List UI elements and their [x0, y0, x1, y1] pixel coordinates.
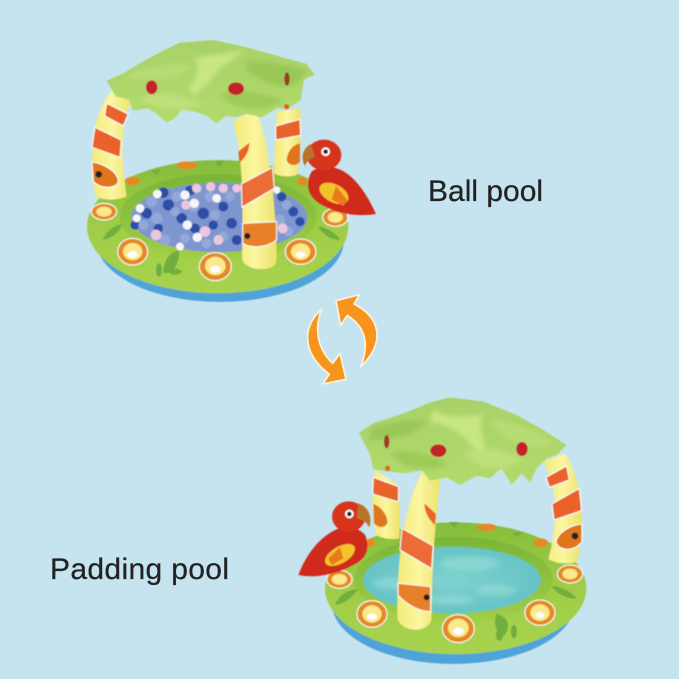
pool base [96, 178, 344, 302]
arrow down [308, 309, 346, 384]
label: Ball pool: Ball pool [428, 175, 543, 208]
padding pool illustration [298, 397, 586, 664]
ladybugs [384, 435, 528, 471]
arrow up [336, 295, 377, 367]
leaf decorations [103, 161, 340, 277]
swap arrows icon [308, 295, 377, 384]
ball pit [130, 182, 307, 252]
water [363, 547, 541, 613]
pool base [332, 543, 575, 664]
back left trunk [373, 470, 400, 539]
parrot [298, 501, 370, 576]
center trunk [397, 469, 441, 630]
back right trunk [274, 108, 301, 176]
pool outer ring [325, 522, 586, 654]
lion badges [327, 524, 583, 643]
canopy [359, 397, 567, 485]
ball pool illustration [87, 40, 376, 302]
left arched trunk [92, 92, 132, 200]
lion badges [91, 161, 348, 281]
ladybugs [146, 72, 290, 109]
leaf decorations [335, 522, 577, 641]
pool outer ring [87, 160, 348, 293]
label: Padding pool: Padding pool [50, 553, 229, 586]
right arched trunk [543, 453, 582, 563]
parrot [303, 140, 376, 215]
canopy [107, 40, 315, 123]
center trunk [233, 108, 277, 269]
